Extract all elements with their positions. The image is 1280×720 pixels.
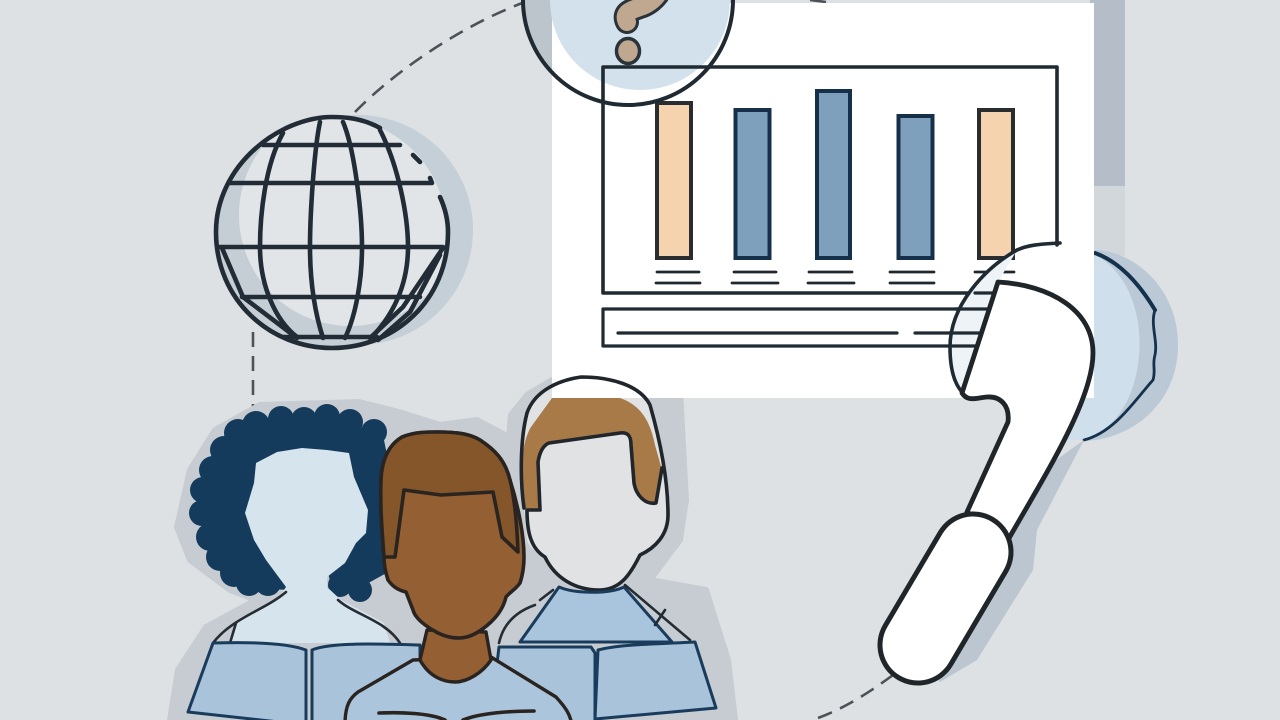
question circle outline	[523, 0, 733, 105]
middle person head	[381, 432, 524, 638]
chart frame	[603, 67, 1057, 293]
left person book	[188, 643, 420, 720]
middle person neck	[420, 630, 491, 682]
left person hair	[189, 404, 392, 602]
hand arm	[962, 282, 1093, 540]
middle person book lines	[379, 711, 534, 720]
left person shoulder outlines	[213, 592, 400, 643]
bar chart	[657, 91, 1013, 258]
question mark circle fill	[550, 0, 730, 90]
left person face and torso	[231, 448, 390, 643]
hand capsule	[918, 552, 973, 645]
right person torso	[499, 585, 690, 643]
globe grid	[216, 117, 448, 348]
right person brown hair	[522, 398, 662, 510]
globe	[216, 104, 473, 348]
globe body	[218, 119, 446, 346]
globe shadow	[243, 115, 473, 345]
dashed connector: globe to people	[252, 332, 254, 416]
question mark circle backing	[523, 0, 733, 105]
bar 2	[736, 110, 770, 258]
middle person body	[345, 657, 572, 720]
bar 4	[898, 116, 932, 258]
right person head outline	[521, 377, 668, 590]
circle behind hand on the right	[1060, 250, 1178, 441]
illustration: people, globe, chart and hand	[167, 0, 1178, 720]
question mark	[616, 0, 658, 64]
dashed connector: globe to question	[355, 2, 525, 112]
right person head fill	[521, 377, 668, 590]
bar 1	[657, 103, 691, 258]
hand shadow	[905, 440, 1084, 682]
right person book	[490, 642, 716, 720]
dashed connector: top stub	[810, 0, 826, 2]
bar 5	[979, 110, 1013, 258]
people shadows	[170, 380, 735, 720]
white paper	[552, 3, 1094, 398]
middle person hair	[381, 432, 518, 557]
middle person	[345, 432, 572, 720]
paper shadow block	[1090, 0, 1125, 256]
caption box	[603, 309, 985, 346]
sleeve cuff lens	[950, 243, 1060, 393]
bar 3	[817, 91, 850, 258]
dashed connector: hand to bottom	[818, 675, 893, 718]
bar labels	[656, 272, 1014, 283]
